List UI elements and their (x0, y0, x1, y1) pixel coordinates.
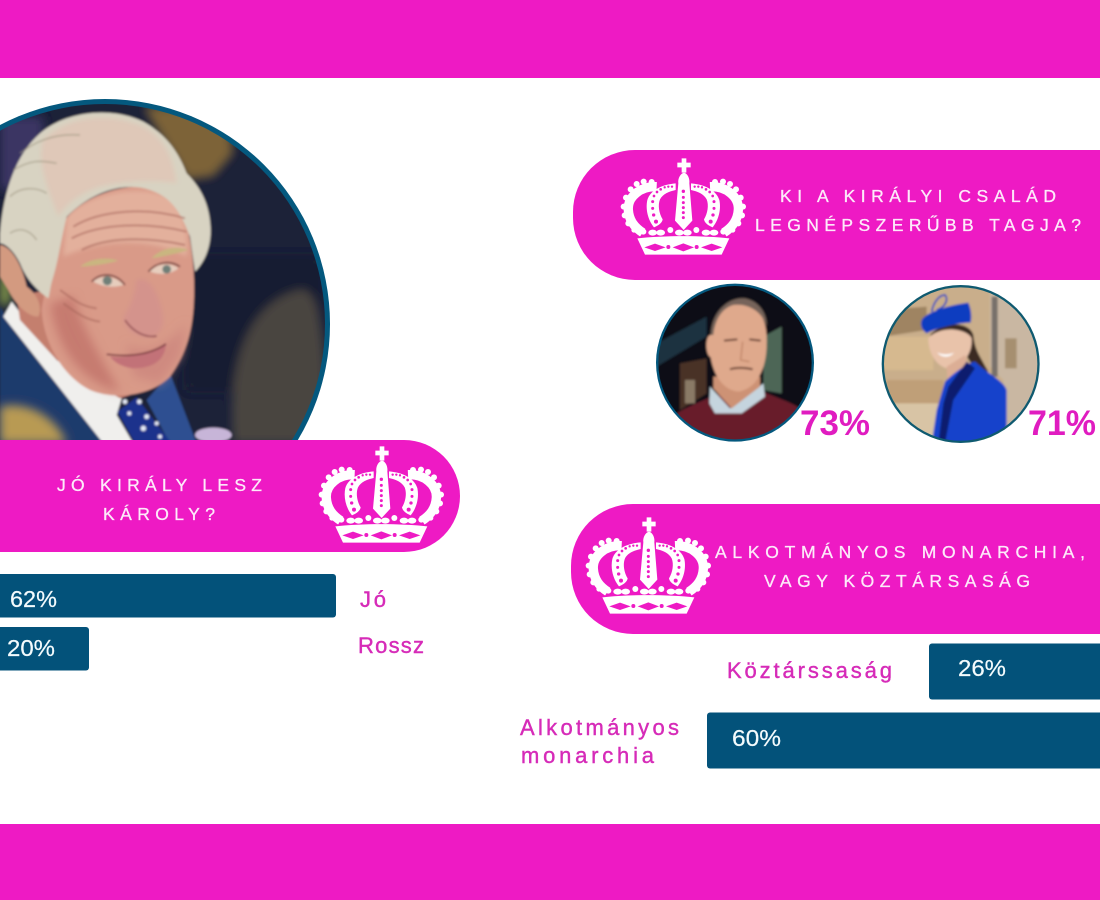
flower (195, 428, 232, 442)
forehead wrinkles (60, 211, 187, 322)
bar chart: Jó / Rossz (0, 574, 424, 670)
value: 71%: 71% (1028, 404, 1096, 443)
collar (3, 302, 133, 443)
value: 73%: 73% (800, 404, 870, 443)
hair (0, 113, 211, 298)
top band (0, 0, 1100, 78)
bar chart: Jó / Rossz: Rossz (358, 633, 424, 658)
photo: Catherine (880, 283, 1096, 447)
eyebrows (80, 248, 188, 267)
hair (930, 324, 988, 372)
bar chart: Köztársaság / Alkotmányos monarchia (520, 644, 1100, 768)
icon: crown left panel (319, 446, 444, 543)
neck (713, 377, 760, 408)
hair (711, 298, 767, 335)
panel: Jó király lesz Károly? (0, 440, 460, 552)
neck and ear (17, 290, 130, 398)
bar chart: Jó / Rossz: Jó (360, 587, 386, 612)
nose (124, 279, 163, 337)
bar chart: Köztársaság / Alkotmányos monarchia: Alkotmányos (520, 715, 679, 740)
neck (947, 356, 966, 378)
mouth (110, 344, 166, 368)
bottom band (0, 824, 1100, 900)
eyes (93, 264, 178, 287)
bar chart: Köztársaság / Alkotmányos monarchia: monarchia (521, 743, 655, 768)
heading: monarchy or republic: ALKOTMÁNYOS MONARCHIA, (715, 542, 1085, 562)
icon: crown top panel (621, 158, 746, 255)
heading: most popular royal: KI A KIRÁLYI CSALÁD (780, 186, 1056, 206)
tie (117, 397, 172, 443)
heading: most popular royal: LEGNÉPSZERŰBB TAGJA? (755, 214, 1081, 235)
bar chart: Jó / Rossz: 20% (7, 635, 55, 661)
head (706, 303, 767, 392)
jacket (0, 307, 103, 443)
panel: Ki a királyi család legnépszerűbb tagja? (573, 150, 1100, 280)
bar chart: Köztársaság / Alkotmányos monarchia: 26% (958, 655, 1006, 681)
photo: Prince William (650, 280, 870, 447)
bar chart: Köztársaság / Alkotmányos monarchia: Köztárssaság (727, 658, 892, 683)
icon: crown lower panel (586, 517, 711, 614)
shirt (709, 383, 765, 413)
panel: Alkotmányos monarchia, vagy köztársaság (571, 504, 1100, 634)
heading: monarchy or republic: VAGY KÖZTÁRSASÁG (764, 571, 1030, 591)
face (928, 330, 972, 368)
jacket (932, 362, 1007, 443)
photo: King Charles (0, 99, 330, 440)
heading: Jó király lesz Károly?: JÓ KIRÁLY LESZ (57, 474, 262, 495)
facial features (724, 339, 761, 369)
face (42, 187, 194, 395)
hat (921, 303, 971, 333)
heading: Jó király lesz Károly? (57, 474, 262, 524)
bar chart: Köztársaság / Alkotmányos monarchia: 60% (732, 725, 781, 751)
sweater (676, 392, 798, 440)
bar chart: Jó / Rossz: 62% (10, 586, 57, 612)
heading: most popular royal (755, 186, 1081, 235)
blurred foreground (0, 405, 67, 443)
heading: Jó király lesz Károly?: KÁROLY? (103, 504, 215, 524)
heading: monarchy or republic (715, 542, 1085, 591)
